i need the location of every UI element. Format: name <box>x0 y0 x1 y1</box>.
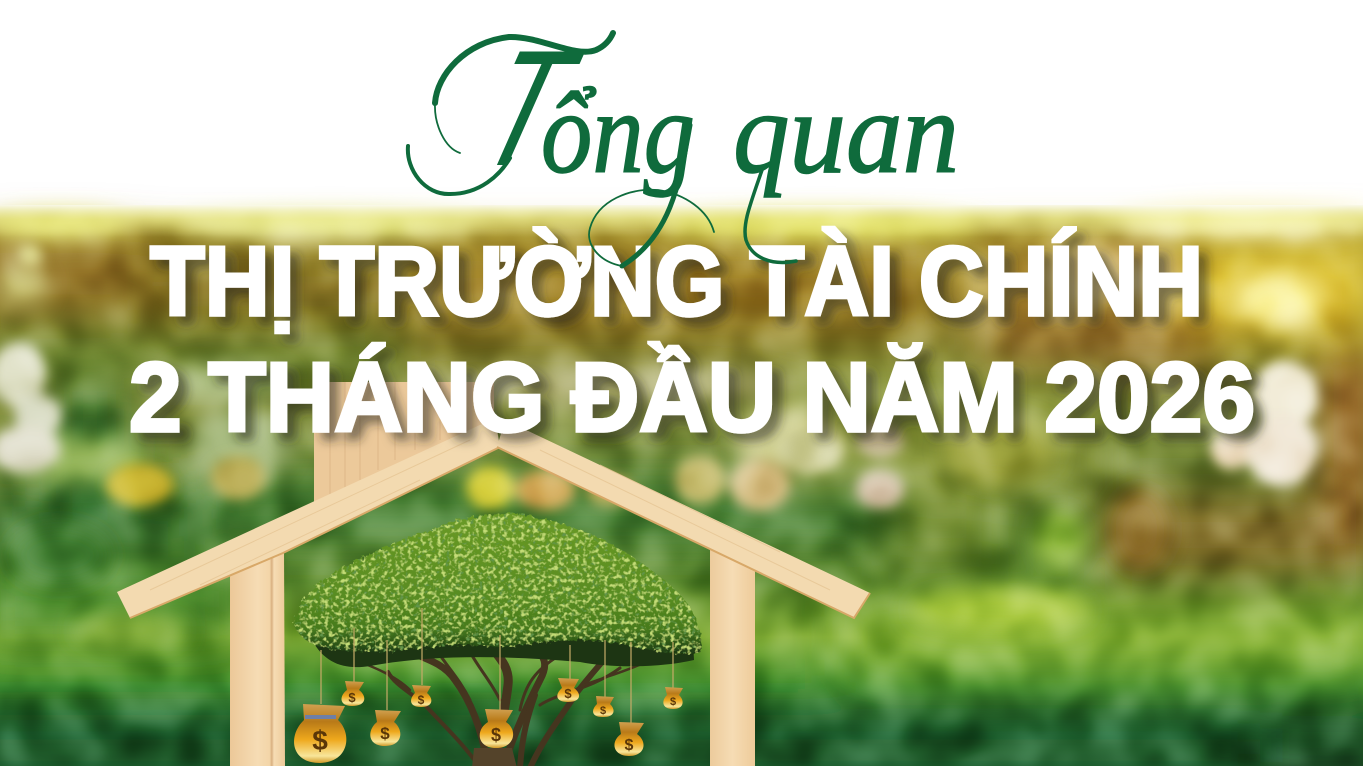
bag large: $ <box>312 725 328 756</box>
bag 9: $ <box>670 696 676 708</box>
heading: T: T <box>462 17 596 201</box>
tree canopy <box>293 513 702 655</box>
bag 3 <box>370 710 401 746</box>
bag 3: $ <box>380 724 390 743</box>
left roof beam <box>117 418 500 618</box>
bag 6: $ <box>564 686 572 701</box>
bag 2 <box>342 681 364 706</box>
bag 7 <box>593 696 614 717</box>
heading: ổng quan: ổng <box>541 67 695 198</box>
bag 4 <box>411 685 431 707</box>
tree canopy underside <box>312 632 694 667</box>
strings <box>321 608 673 723</box>
tree trunk base <box>472 748 517 766</box>
white header band <box>0 0 1363 205</box>
left post <box>230 548 285 766</box>
money bags <box>294 608 683 763</box>
script title <box>408 17 959 266</box>
bag 9 <box>663 687 683 709</box>
bag 6 <box>557 678 579 702</box>
flourish strokes <box>408 33 796 266</box>
right roof beam <box>497 420 870 618</box>
tree <box>293 513 702 766</box>
bag 8 <box>614 722 644 756</box>
heading: ổng quan: quan <box>733 67 959 198</box>
bag 8: $ <box>625 737 634 754</box>
bag 5: $ <box>491 725 501 745</box>
bag 4: $ <box>418 693 425 707</box>
right post <box>710 545 755 766</box>
tree trunk and branches <box>340 648 650 766</box>
house frame back: chimney <box>314 382 494 510</box>
heading line 1: THỊ TRƯỜNG TÀI CHÍNH <box>150 226 1203 336</box>
wooden house frame <box>117 418 870 766</box>
blurred garden background <box>0 205 1363 766</box>
heading line 2: 2 THÁNG ĐẦU NĂM 2026 <box>129 342 1255 452</box>
main heading <box>129 226 1255 452</box>
bag 5 <box>480 709 513 748</box>
bag large <box>294 704 346 763</box>
bag 7: $ <box>600 705 606 717</box>
bag 2: $ <box>348 690 356 705</box>
